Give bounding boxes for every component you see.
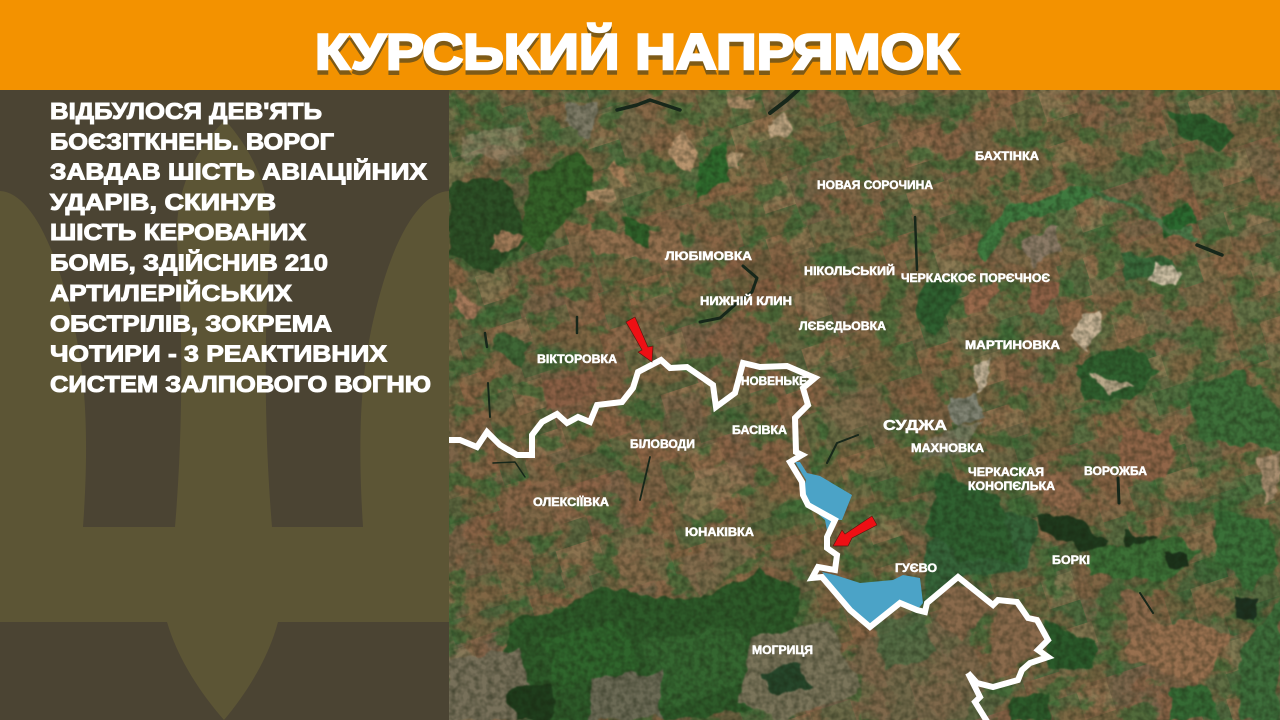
map settlement labels: МАРТИНОВКА	[965, 340, 1060, 352]
map settlement labels: НОВАЯ СОРОЧИНА	[817, 180, 933, 192]
icon: trident watermark	[0, 120, 449, 720]
map settlement labels: ОЛЕКСІЇВКА	[533, 496, 609, 509]
map settlement labels: ГУЄВО	[895, 563, 937, 575]
map field patches	[449, 95, 1280, 720]
map settlement labels: ЧЕРКАСКОЄ ПОРЄЧНОЄ	[901, 273, 1050, 285]
map settlement labels: НИЖНІЙ КЛИН	[700, 295, 792, 308]
map settlement labels: ВІКТОРОВКА	[537, 354, 617, 366]
map settlement labels: ЮНАКІВКА	[685, 527, 754, 539]
text block: summary: ЧОТИРИ - 3 РЕАКТИВНИХ	[50, 340, 387, 366]
text block: summary: УДАРІВ, СКИНУВ	[50, 189, 276, 215]
map rivers	[485, 90, 1222, 613]
header banner	[0, 0, 1280, 90]
map settlement labels	[533, 151, 1147, 657]
map settlement labels: БІЛОВОДИ	[630, 439, 695, 451]
arrow: north red arrow	[626, 317, 653, 362]
panel: left text panel	[0, 90, 449, 720]
map settlement labels: НІКОЛЬСЬКИЙ	[804, 265, 895, 278]
map settlement labels: БОРКІ	[1052, 555, 1090, 567]
blue occupied area: upper	[795, 462, 852, 530]
text block: summary: БОЄЗІТКНЕНЬ. ВОРОГ	[50, 128, 334, 154]
title: КУРСЬКИЙ НАПРЯМОК	[315, 28, 960, 84]
arrow: south red arrow	[833, 516, 877, 546]
text block: summary	[50, 98, 431, 397]
map settlement labels: БАХТІНКА	[975, 151, 1039, 163]
text block: summary: ЗАВДАВ ШІСТЬ АВІАЦІЙНИХ	[50, 158, 427, 184]
map settlement labels: ЛЮБІМОВКА	[665, 251, 752, 263]
map settlement labels: НОВЕНЬКЕ	[741, 376, 807, 388]
map settlement labels: КОНОПЄЛЬКА	[968, 481, 1055, 493]
map settlement labels: МОГРИЦЯ	[752, 645, 813, 657]
map settlement labels: СУДЖА	[883, 417, 947, 434]
map settlement labels: ВОРОЖБА	[1084, 466, 1147, 478]
map settlement labels: БАСІВКА	[732, 425, 787, 437]
text block: summary: ОБСТРІЛІВ, ЗОКРЕМА	[50, 310, 332, 336]
text block: summary: ШІСТЬ КЕРОВАНИХ	[50, 219, 306, 245]
text block: summary: АРТИЛЕРІЙСЬКИХ	[50, 279, 292, 306]
text block: summary: СИСТЕМ ЗАЛПОВОГО ВОГНЮ	[50, 371, 431, 397]
state border line	[449, 360, 1048, 720]
text block: summary: БОМБ, ЗДІЙСНИВ 210	[50, 248, 328, 276]
map settlement labels: МАХНОВКА	[911, 443, 984, 455]
map settlement labels: ЛЄБЄДЬОВКА	[799, 321, 886, 333]
blue occupied area: lower	[822, 572, 923, 623]
map settlement labels: ЧЕРКАСКАЯ	[968, 467, 1044, 479]
title: КУРСЬКИЙ НАПРЯМОК	[315, 23, 960, 80]
panel: satellite map	[400, 60, 1280, 720]
text block: summary: ВІДБУЛОСЯ ДЕВ'ЯТЬ	[50, 98, 322, 124]
